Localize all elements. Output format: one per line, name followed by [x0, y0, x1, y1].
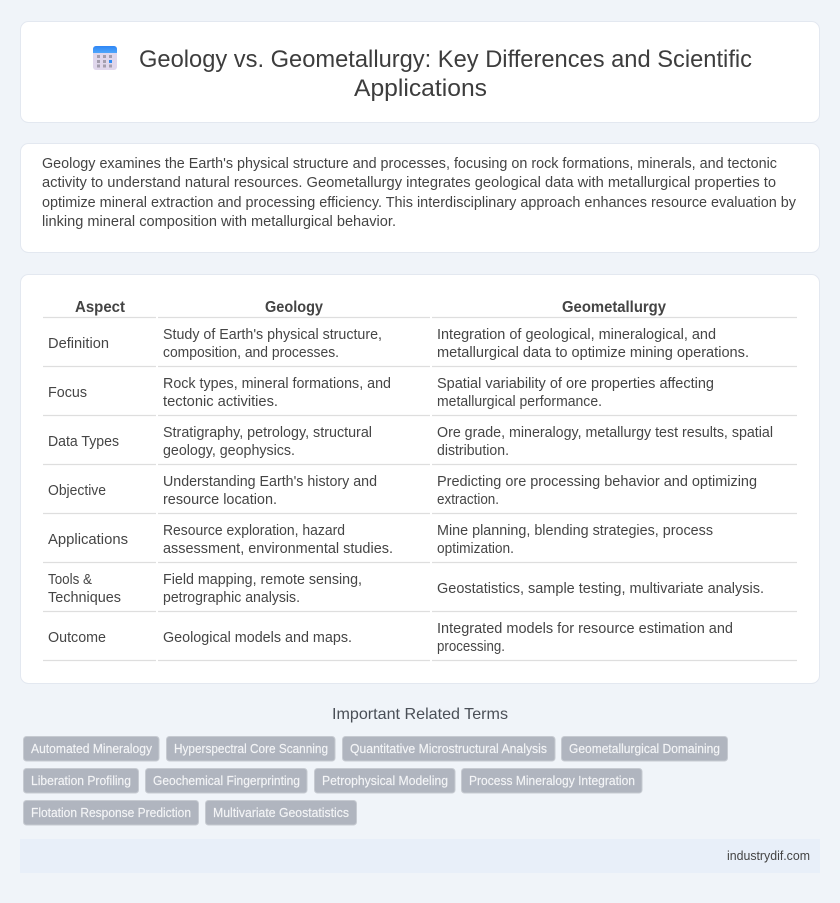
row: outcome	[48, 620, 733, 655]
row: definition: metallurgical data to optimize mining operations.	[437, 344, 749, 361]
row: applications: Mine planning, blending strategies, process	[437, 522, 713, 539]
row: objective: extraction.	[437, 491, 499, 508]
panel: related term tags: Geometallurgical Domaining	[569, 741, 720, 756]
row: focus: Focus	[48, 384, 87, 401]
panel: related term tags: Multivariate Geostatistics	[213, 805, 349, 820]
footer: industrydif.com	[727, 848, 810, 863]
row: data types: Stratigraphy, petrology, structural	[163, 424, 372, 441]
row: data types: Data Types	[48, 433, 119, 450]
row: applications: Applications	[48, 531, 128, 548]
title	[139, 46, 752, 102]
panel: related term tags: Hyperspectral Core Scanning	[174, 741, 328, 756]
row: outcome: Integrated models for resource estimation and	[437, 620, 733, 637]
panel: introduction	[20, 144, 820, 252]
panel: comparison table	[20, 274, 820, 684]
row: objective: Predicting ore processing behavior and optimizing	[437, 473, 757, 490]
row: data types: distribution.	[437, 442, 509, 459]
row: objective: Understanding Earth's history and	[163, 473, 377, 490]
panel: related term tags: Petrophysical Modeling	[322, 773, 448, 788]
row: data types: geology, geophysics.	[163, 442, 295, 459]
row: focus: Rock types, mineral formations, and	[163, 375, 391, 392]
heading: related terms: Important Related Terms	[332, 706, 508, 723]
row: tools and techniques: petrographic analysis.	[163, 589, 300, 606]
row: definition: composition, and processes.	[163, 344, 339, 361]
row: focus: Spatial variability of ore properties affecting	[437, 375, 714, 392]
intro paragraph	[42, 155, 796, 230]
table header row: Geometallurgy	[562, 299, 666, 316]
row: data types: Ore grade, mineralogy, metallurgy test results, spatial	[437, 424, 773, 441]
row: outcome: processing.	[437, 638, 505, 655]
row: focus	[48, 375, 714, 410]
row: applications: assessment, environmental studies.	[163, 540, 393, 557]
row: focus: tectonic activities.	[163, 393, 278, 410]
panel: related term tags: Automated Mineralogy	[31, 741, 152, 756]
panel: related term tags: Geochemical Fingerprinting	[153, 773, 300, 788]
row: objective	[48, 473, 757, 508]
icon: calendar	[93, 46, 117, 70]
row: tools and techniques: Tools &	[48, 571, 92, 588]
intro paragraph: linking mineral composition with metallurgical behavior.	[42, 213, 396, 230]
row: tools and techniques: Geostatistics, sample testing, multivariate analysis.	[437, 580, 764, 597]
row: outcome: Outcome	[48, 629, 106, 646]
panel: related term tags: Liberation Profiling	[31, 773, 131, 788]
row: focus: metallurgical performance.	[437, 393, 602, 410]
footer	[20, 839, 820, 873]
row: definition: Integration of geological, mineralogical, and	[437, 326, 716, 343]
row: applications: Resource exploration, hazard	[163, 522, 345, 539]
row: outcome: Geological models and maps.	[163, 629, 352, 646]
title: Geology vs. Geometallurgy: Key Differences and Scientific	[139, 46, 752, 73]
row: definition: Definition	[48, 335, 109, 352]
row: definition	[48, 326, 749, 361]
row: tools and techniques: Field mapping, remote sensing,	[163, 571, 362, 588]
panel: related term tags: Flotation Response Prediction	[31, 805, 191, 820]
table header row: Geology	[265, 299, 323, 316]
intro paragraph: activity to understand natural resources. Geometallurgy integrates geological data with metallurgical properties to	[42, 174, 776, 191]
row: objective: resource location.	[163, 491, 277, 508]
row: tools and techniques: Techniques	[48, 589, 121, 606]
intro paragraph: Geology examines the Earth's physical structure and processes, focusing on rock formations, minerals, and tectonic	[42, 155, 777, 172]
row: applications: optimization.	[437, 540, 514, 557]
table header row	[75, 299, 666, 316]
row: applications	[48, 522, 713, 557]
panel: related term tags: Process Mineralogy Integration	[469, 773, 635, 788]
panel: header	[20, 22, 820, 122]
row: definition: Study of Earth's physical structure,	[163, 326, 382, 343]
panel: related term tags: Quantitative Microstructural Analysis	[350, 741, 547, 756]
table header row: Aspect	[75, 299, 126, 316]
row: tools and techniques	[48, 571, 764, 606]
intro paragraph: optimize mineral extraction and processing efficiency. This interdisciplinary approach enhances resource evaluation by	[42, 194, 796, 211]
panel: related term tags	[24, 736, 728, 825]
row: data types	[48, 424, 773, 459]
title: Applications	[354, 75, 487, 102]
row: objective: Objective	[48, 482, 106, 499]
